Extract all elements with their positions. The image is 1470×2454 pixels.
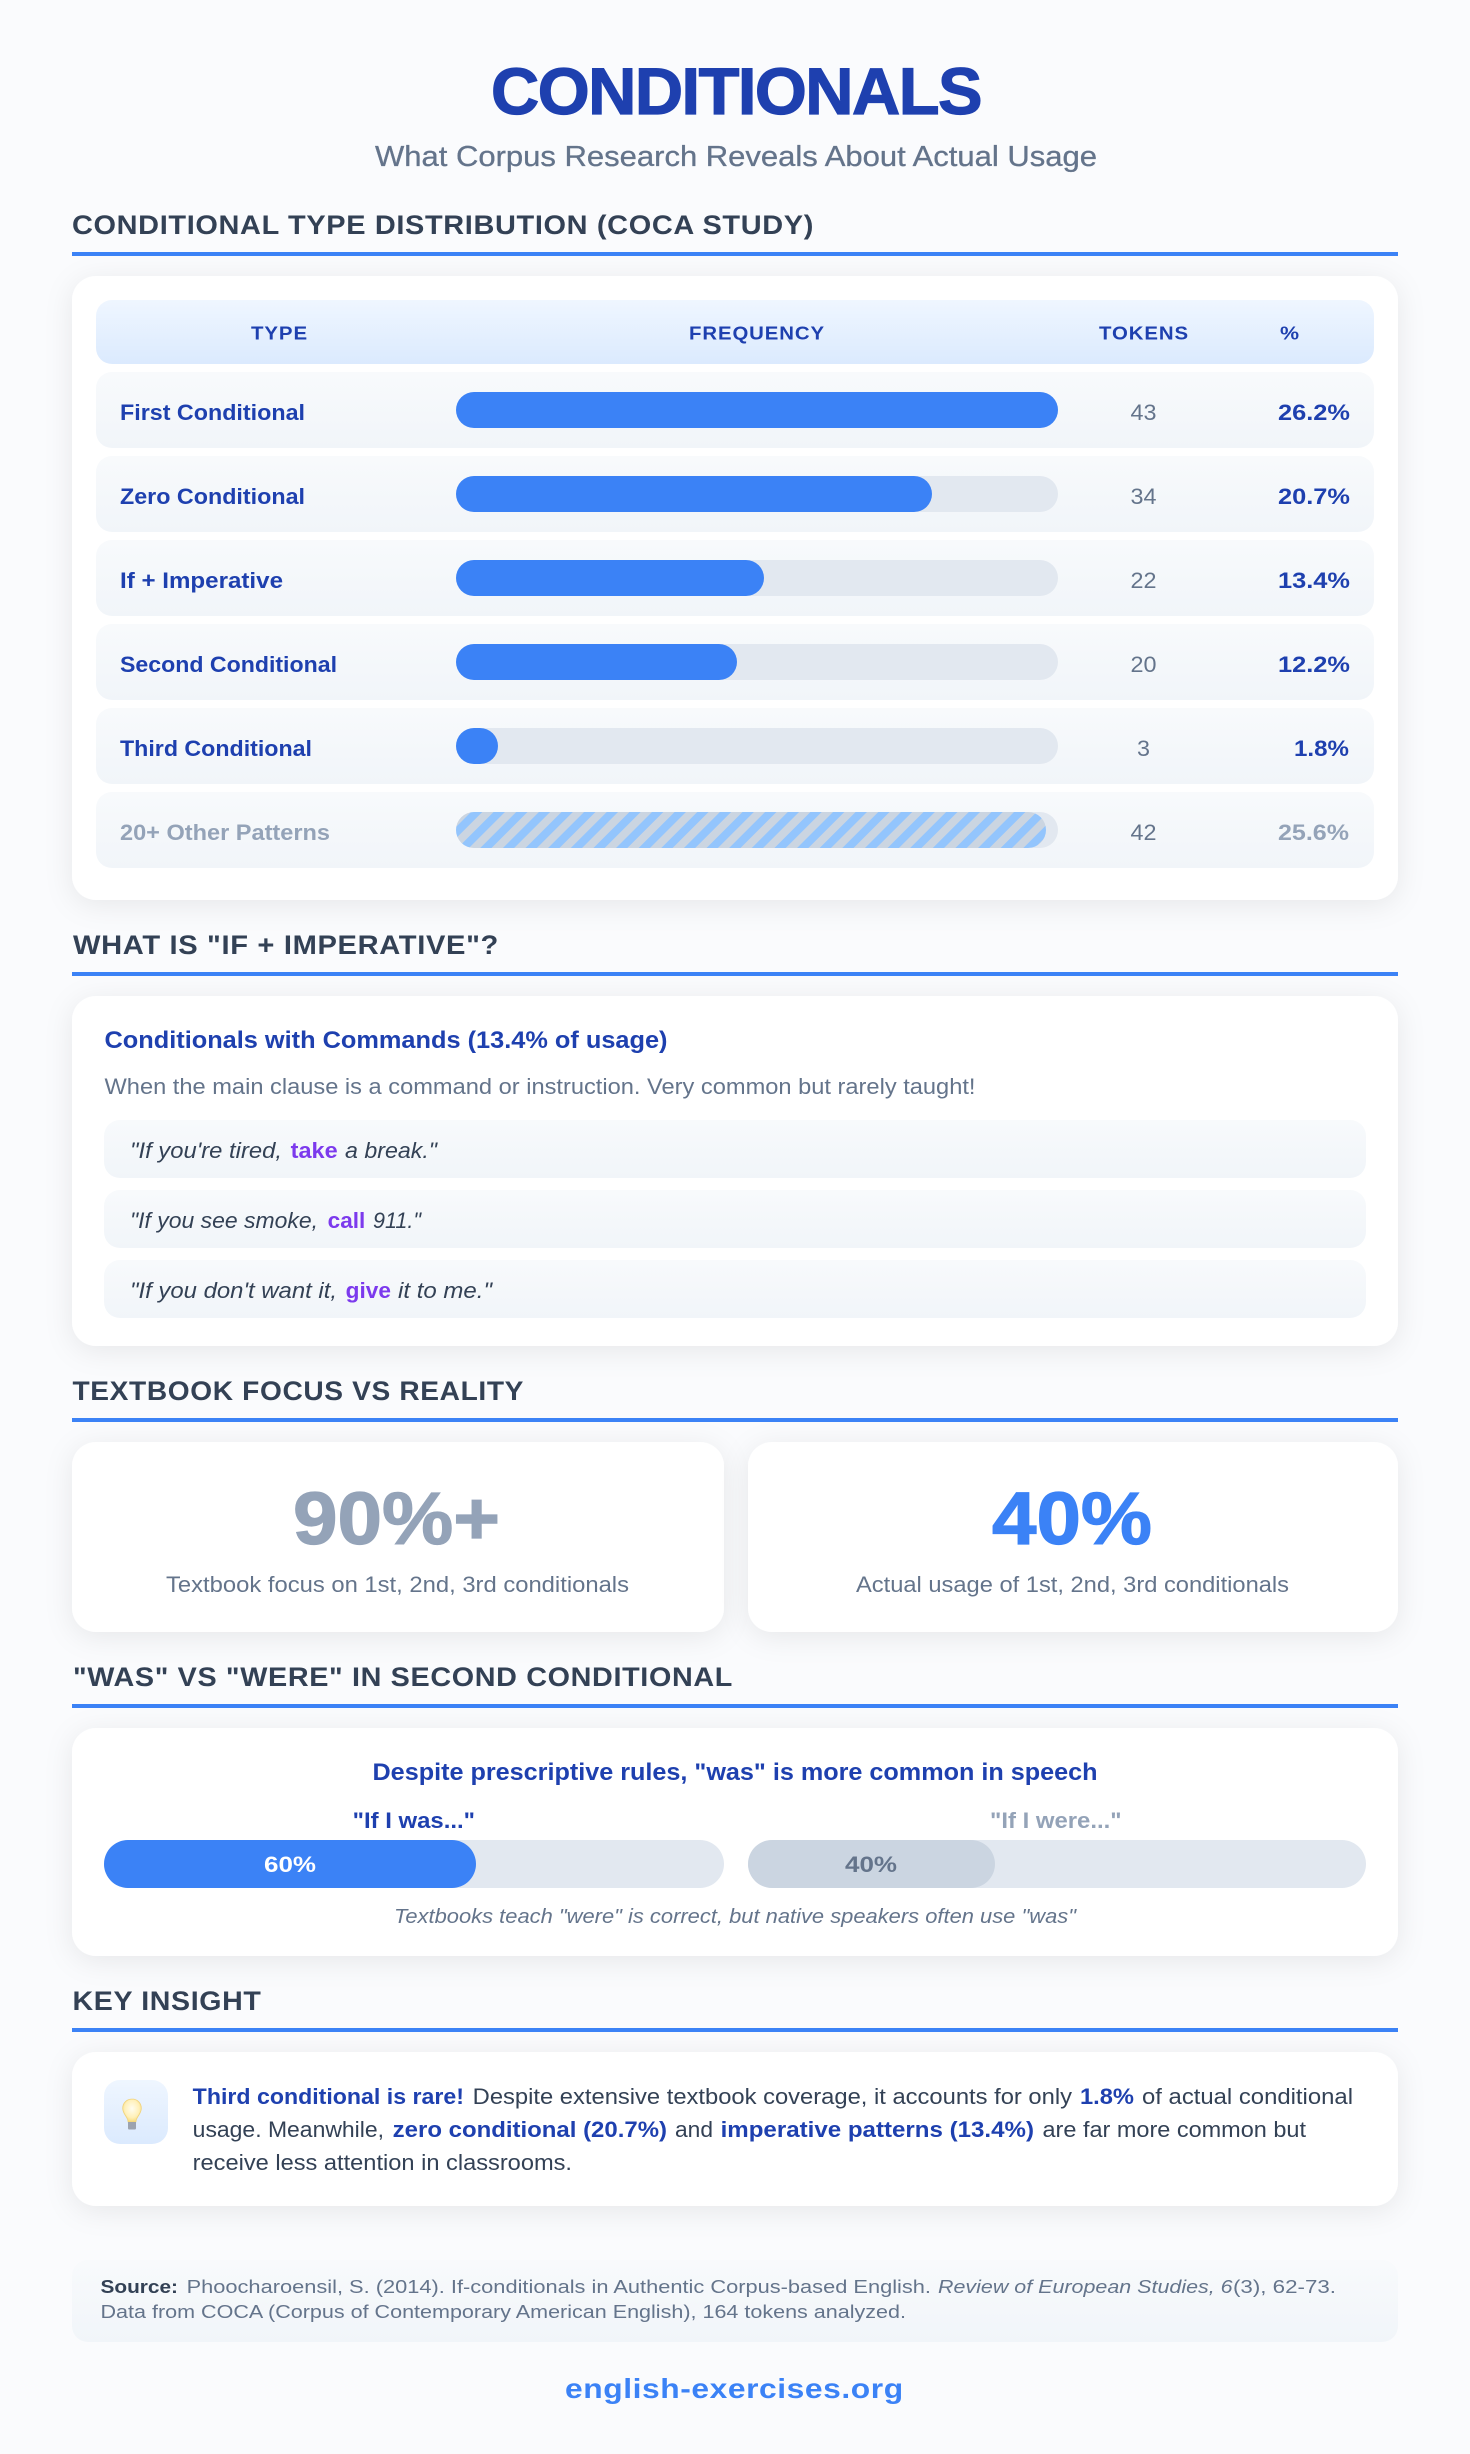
insight text: imperative patterns (13.4%) bbox=[721, 2117, 1034, 2142]
insight text bbox=[193, 2084, 1353, 2175]
example 2: "If you see smoke, bbox=[130, 1208, 318, 1233]
table header: TYPE bbox=[251, 324, 308, 344]
row: other patterns: 20+ Other Patterns bbox=[120, 820, 330, 845]
panel: was vs were comparison bbox=[72, 1728, 1398, 1956]
insight text: are far more common but bbox=[1042, 2117, 1307, 2142]
example 3: "If you don't want it, bbox=[130, 1278, 337, 1303]
panel: source citation: Source: bbox=[100, 2276, 178, 2297]
row: if + imperative: 13.4% bbox=[1278, 568, 1350, 593]
row: if + imperative: 22 bbox=[1130, 568, 1156, 593]
row: third conditional: 3 bbox=[1137, 736, 1150, 761]
panel: source citation: Phoocharoensil, S. (2014). If-conditionals in Authentic Corpus-based English. bbox=[187, 2276, 931, 2297]
insight text: zero conditional (20.7%) bbox=[393, 2117, 667, 2142]
icon: light bulb bbox=[104, 2080, 168, 2144]
table header bbox=[96, 300, 1374, 364]
title: CONDITIONALS bbox=[491, 54, 981, 128]
example 3: give bbox=[346, 1278, 391, 1303]
row: first conditional: 26.2% bbox=[1278, 400, 1350, 425]
row: third conditional: 1.8% bbox=[1294, 736, 1349, 761]
bar: if I were bbox=[748, 1808, 1366, 1888]
row: third conditional bbox=[96, 708, 1374, 784]
example 1: take bbox=[291, 1138, 338, 1163]
row: second conditional: 12.2% bbox=[1278, 652, 1350, 677]
section heading: key insight: KEY INSIGHT bbox=[72, 1986, 262, 2016]
row: zero conditional: 34 bbox=[1130, 484, 1156, 509]
panel: distribution table bbox=[72, 276, 1398, 900]
row: zero conditional bbox=[96, 456, 1374, 532]
footer: website: english-exercises.org bbox=[565, 2373, 904, 2404]
table header: TOKENS bbox=[1099, 324, 1189, 344]
row: first conditional: First Conditional bbox=[120, 400, 305, 425]
bar: if I were: 40% bbox=[845, 1852, 897, 1877]
section heading: was vs were bbox=[72, 1662, 1398, 1708]
panel: source citation: Data from COCA (Corpus of Contemporary American English), 164 tokens analyzed. bbox=[100, 2301, 906, 2322]
example 1: a break." bbox=[345, 1138, 438, 1163]
panel: actual usage stat bbox=[748, 1442, 1398, 1632]
panel: source citation bbox=[72, 2260, 1398, 2342]
panel: if + imperative explanation bbox=[72, 996, 1398, 1346]
stat caption: Textbook focus on 1st, 2nd, 3rd conditionals bbox=[166, 1572, 629, 1597]
example 2: call bbox=[328, 1208, 365, 1233]
row: second conditional: 20 bbox=[1130, 652, 1156, 677]
section heading: key insight bbox=[72, 1986, 1398, 2032]
note: Textbooks teach "were" is correct, but native speakers often use "was" bbox=[394, 1905, 1078, 1928]
table header: FREQUENCY bbox=[689, 324, 825, 344]
row: if + imperative: If + Imperative bbox=[120, 568, 283, 593]
row: if + imperative bbox=[96, 540, 1374, 616]
insight text: Despite extensive textbook coverage, it accounts for only bbox=[473, 2084, 1073, 2109]
section heading: conditional type distribution: CONDITIONAL TYPE DISTRIBUTION (COCA STUDY) bbox=[72, 210, 814, 240]
stat caption: Actual usage of 1st, 2nd, 3rd conditionals bbox=[856, 1572, 1289, 1597]
insight text: Third conditional is rare! bbox=[193, 2084, 464, 2109]
stat number: 40% bbox=[992, 1477, 1152, 1560]
row: zero conditional: Zero Conditional bbox=[120, 484, 305, 509]
subtitle: What Corpus Research Reveals About Actual Usage bbox=[375, 141, 1097, 173]
example 1: "If you're tired, bbox=[130, 1138, 282, 1163]
panel heading: Despite prescriptive rules, "was" is more common in speech bbox=[372, 1759, 1098, 1786]
table header: % bbox=[1280, 324, 1300, 344]
panel: source citation: Review of European Studies, 6 bbox=[938, 2276, 1233, 2297]
insight text: of actual conditional bbox=[1142, 2084, 1353, 2109]
section heading: was vs were: "WAS" VS "WERE" IN SECOND CONDITIONAL bbox=[73, 1662, 733, 1692]
row: second conditional bbox=[96, 624, 1374, 700]
bar: if I was bbox=[104, 1808, 724, 1888]
panel: key insight bbox=[72, 2052, 1398, 2206]
bar: if I was: "If I was..." bbox=[353, 1808, 475, 1833]
example 2 bbox=[104, 1190, 1366, 1248]
bar: if I was: 60% bbox=[264, 1852, 316, 1877]
insight text: usage. Meanwhile, bbox=[193, 2117, 384, 2142]
panel: source citation: (3), 62-73. bbox=[1233, 2276, 1336, 2297]
row: other patterns: 25.6% bbox=[1278, 820, 1349, 845]
row: zero conditional: 20.7% bbox=[1278, 484, 1350, 509]
row: other patterns bbox=[96, 792, 1374, 868]
example 1 bbox=[104, 1120, 1366, 1178]
bar: if I were: "If I were..." bbox=[990, 1808, 1122, 1833]
panel: textbook focus stat bbox=[72, 1442, 724, 1632]
row: third conditional: Third Conditional bbox=[120, 736, 312, 761]
section heading: conditional type distribution bbox=[72, 210, 1398, 256]
insight text: 1.8% bbox=[1080, 2084, 1134, 2109]
section heading: textbook focus vs reality: TEXTBOOK FOCUS VS REALITY bbox=[72, 1376, 524, 1406]
section heading: if + imperative: WHAT IS "IF + IMPERATIVE"? bbox=[73, 930, 499, 960]
panel heading: Conditionals with Commands (13.4% of usage) bbox=[104, 1027, 668, 1054]
section heading: textbook focus vs reality bbox=[72, 1376, 1398, 1422]
example 3 bbox=[104, 1260, 1366, 1318]
insight text: and bbox=[675, 2117, 713, 2142]
row: second conditional: Second Conditional bbox=[120, 652, 337, 677]
description: When the main clause is a command or instruction. Very common but rarely taught! bbox=[104, 1074, 976, 1099]
example 3: it to me." bbox=[398, 1278, 493, 1303]
insight text: receive less attention in classrooms. bbox=[193, 2150, 572, 2175]
stat number: 90%+ bbox=[293, 1477, 500, 1560]
row: other patterns: 42 bbox=[1130, 820, 1156, 845]
row: first conditional: 43 bbox=[1130, 400, 1156, 425]
row: first conditional bbox=[96, 372, 1374, 448]
example 2: 911." bbox=[373, 1208, 422, 1233]
section heading: if + imperative bbox=[72, 930, 1398, 976]
